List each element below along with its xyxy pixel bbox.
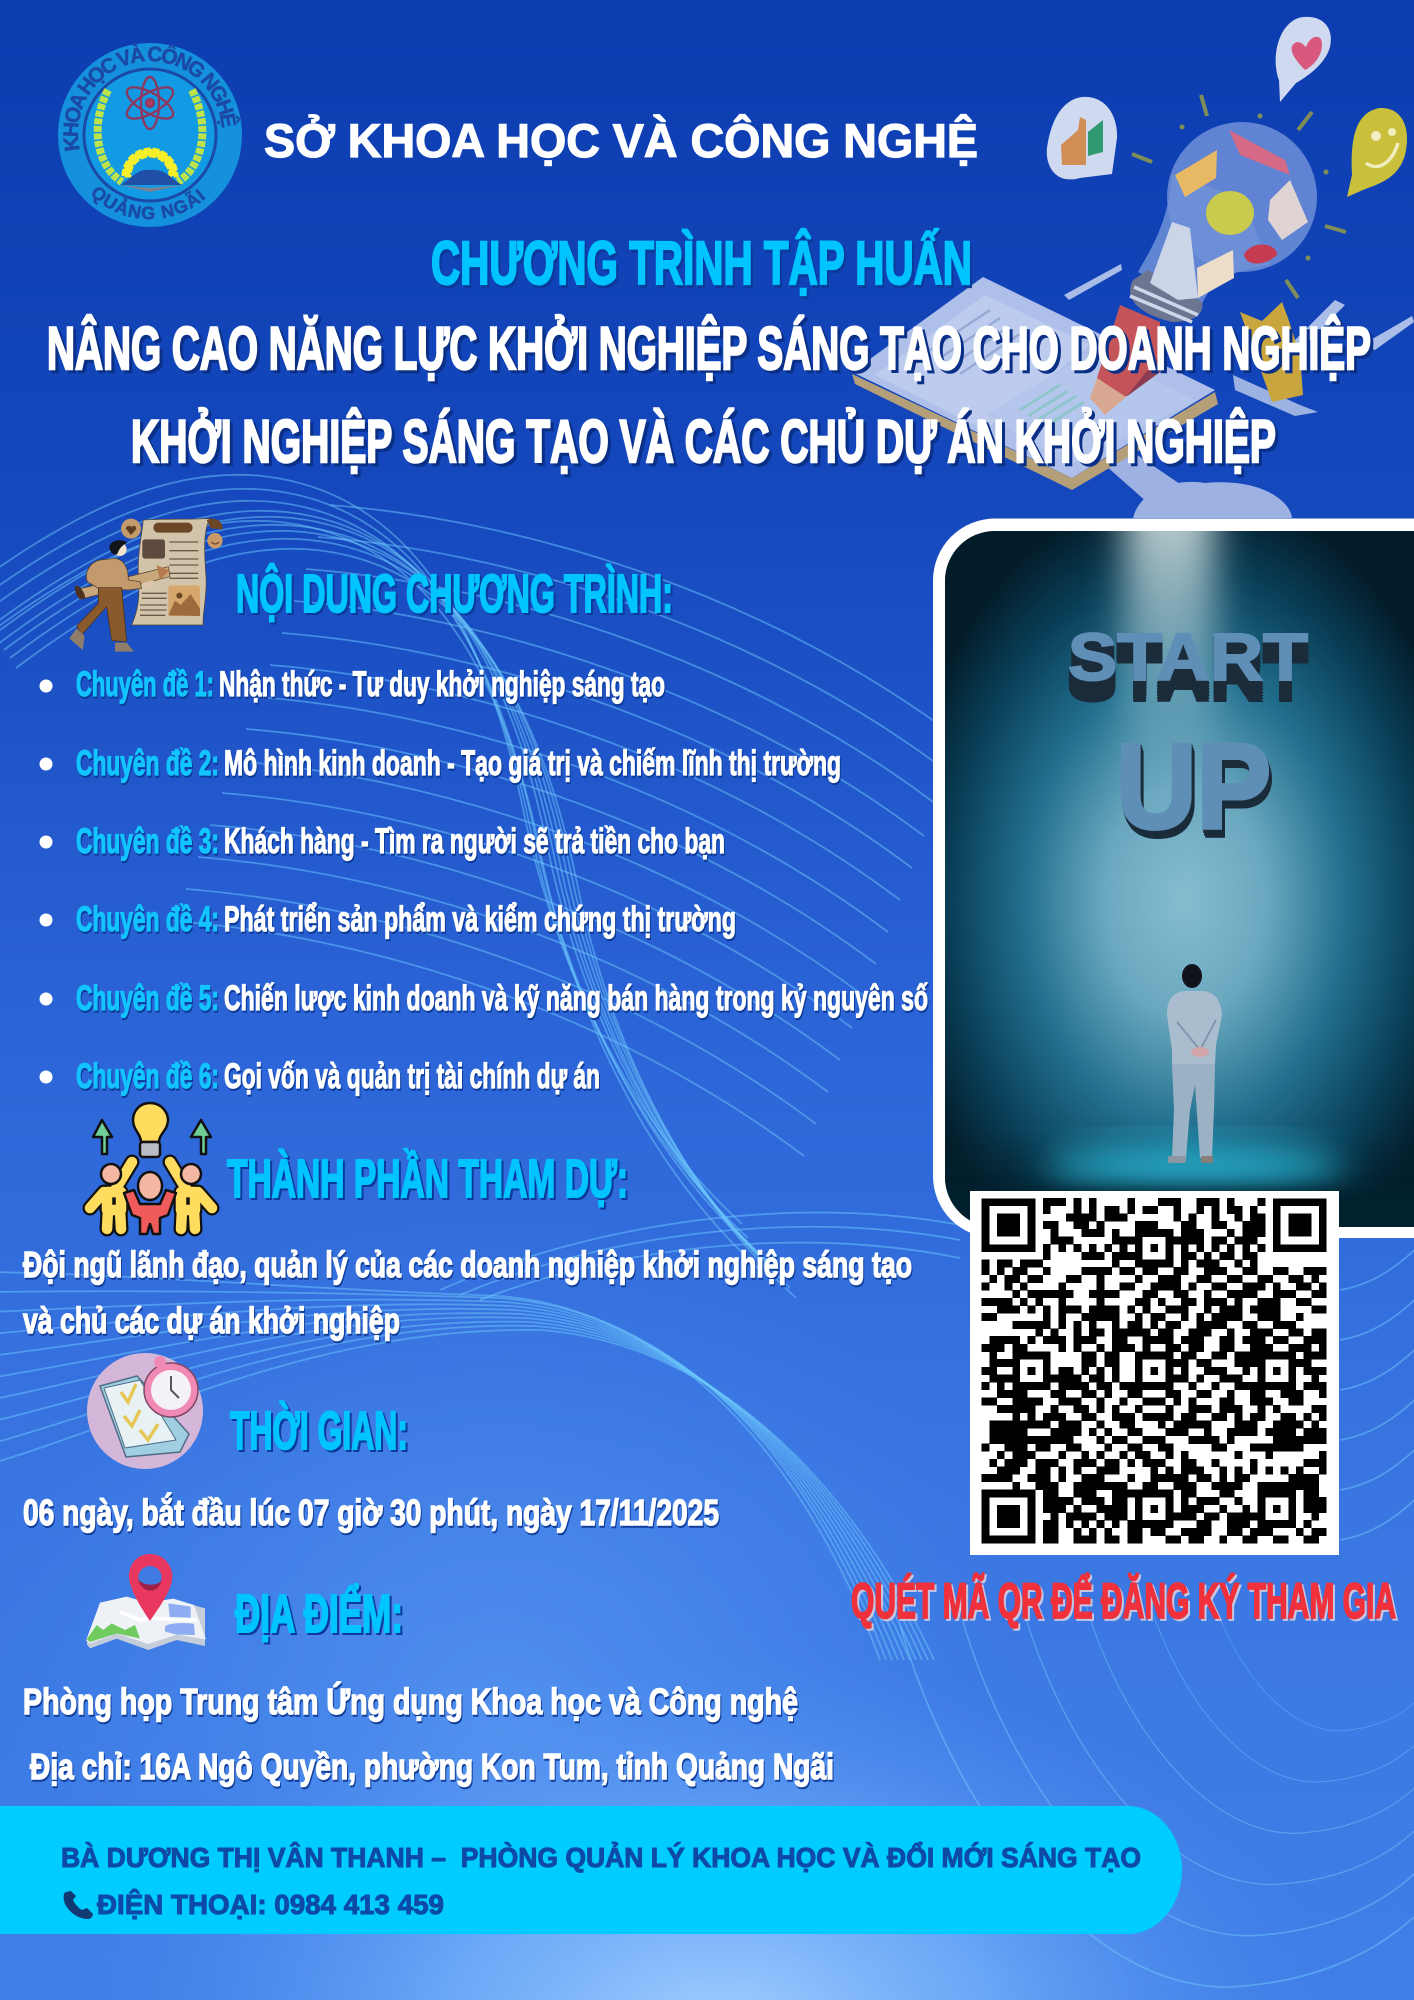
topic 2 [76,744,841,783]
topic 4 [76,900,736,939]
illustration: light bulb, pencil, book and speech bubbles [852,17,1414,518]
topic 3: Chuyên đề 3: [76,822,219,861]
icon: phone [64,1891,93,1919]
topic 6: Chuyên đề 6: [76,1057,219,1096]
logo atom symbol [122,77,178,129]
photo: START lettering: START [1068,620,1308,695]
icon: person with scroll [69,518,223,652]
topic 6: Gọi vốn và quản trị tài chính dự án [224,1057,600,1096]
list: training topics [40,665,928,1096]
logo: Sở Khoa học và Công nghệ Quảng Ngãi [58,43,242,227]
contact person: BÀ DƯƠNG THỊ VÂN THANH – PHÒNG QUẢN LÝ KHOA HỌC VÀ ĐỔI MỚI SÁNG TẠO [61,1841,1141,1873]
topic 2: Mô hình kinh doanh - Tạo giá trị và chiếm lĩnh thị trường [224,744,841,783]
topic 4: Chuyên đề 4: [76,900,219,939]
text: time details: 06 ngày, bắt đầu lúc 07 giờ 30 phút, ngày 17/11/2025 [23,1491,719,1533]
photo: UP lettering: UP [1116,718,1271,854]
logo wheat wreath [98,90,202,182]
text: venue address: Địa chỉ: 16A Ngô Quyền, phường Kon Tum, tỉnh Quảng Ngãi [30,1746,834,1787]
header: organisation name: SỞ KHOA HỌC VÀ CÔNG NGHỆ [264,114,978,167]
heading: participants: THÀNH PHẦN THAM DỰ: [227,1149,628,1209]
logo arc text bottom: QUẢNG NGÃI [92,187,206,220]
topic 5 [76,979,928,1018]
topic 1: Nhận thức - Tư duy khởi nghiệp sáng tạo [219,665,665,704]
QR code [970,1191,1339,1555]
logo gear and book [120,149,182,192]
heading: venue: ĐỊA ĐIỂM: [235,1584,403,1644]
icon: people with light bulb [90,1103,212,1234]
icon: calendar and clock [87,1353,203,1469]
topic 2: Chuyên đề 2: [76,744,219,783]
photo panel: start up spotlight [933,490,1414,1238]
contact phone: ĐIỆN THOẠI: 0984 413 459 [97,1889,444,1920]
topic 5: Chuyên đề 5: [76,979,219,1018]
heading: time: THỜI GIAN: [230,1401,408,1461]
heading: programme content: NỘI DUNG CHƯƠNG TRÌNH: [236,563,673,624]
topic 3 [76,822,725,861]
text: venue name: Phòng họp Trung tâm Ứng dụng Khoa học và Công nghệ [23,1680,798,1722]
icon: map pin [86,1554,206,1650]
text: participants line 2: và chủ các dự án khởi nghiệp [23,1300,400,1341]
topic 1: Chuyên đề 1: [76,665,214,704]
topic 6 [76,1057,600,1096]
title: programme label: CHƯƠNG TRÌNH TẬP HUẤN [431,229,972,297]
topic 5: Chiến lược kinh doanh và kỹ năng bán hàng trong kỷ nguyên số [224,979,928,1018]
logo arc text top: KHOA HỌC VÀ CÔNG NGHỆ [63,44,240,151]
topic 4: Phát triển sản phẩm và kiểm chứng thị trường [224,900,736,939]
contact banner [0,1806,1182,1934]
text: participants line 1: Đội ngũ lãnh đạo, quản lý của các doanh nghiệp khởi nghiệp sáng tạo [23,1244,912,1285]
topic 1 [76,665,665,704]
topic 3: Khách hàng - Tìm ra người sẽ trả tiền cho bạn [224,822,725,861]
photo: man from behind [1167,964,1222,1163]
